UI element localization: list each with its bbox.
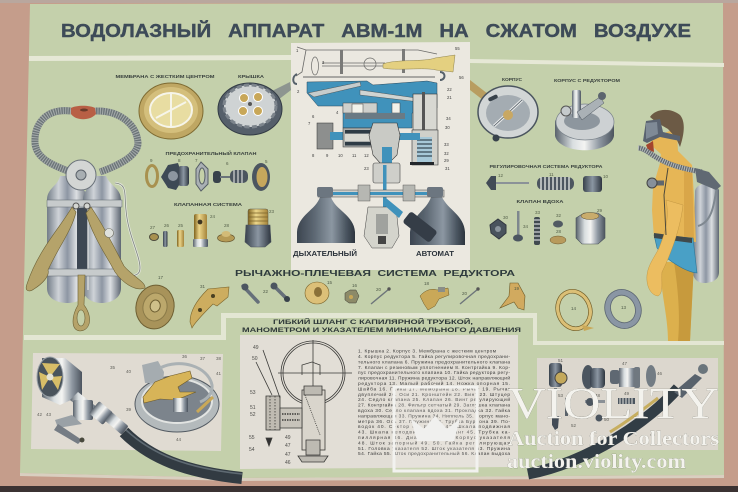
hose [124, 364, 708, 478]
part numbers, middle row: 14 [571, 306, 577, 311]
heading: lever system: РЫЧАЖНО-ПЛЕЧЕВАЯ СИСТЕМА РЕДУКТОРА [235, 269, 515, 278]
drawing callouts: 50 [252, 356, 258, 362]
numbers: 53 [558, 393, 564, 398]
part: housing [470, 80, 538, 142]
drawing callouts: 55 [249, 435, 255, 441]
text watermark: Auction for Collectors [508, 428, 719, 450]
legend text: 24. Седло клапана 25. Клапан 26. Винт регулирующий [358, 396, 510, 403]
inhalation valve [393, 92, 438, 165]
callout numbers: 29 [444, 158, 449, 163]
part numbers, top left [150, 158, 275, 230]
lower frame strip [24, 313, 724, 345]
numbers: 38 [216, 356, 222, 361]
numbers: 48 [595, 393, 601, 398]
labels: right parts: КОРПУС [502, 77, 523, 82]
part: cover [218, 82, 291, 135]
numbers: 36 [182, 354, 188, 359]
part numbers, middle row: 20 [462, 291, 468, 296]
part numbers, middle row: 20 [376, 287, 382, 292]
callout numbers: 56 [459, 75, 464, 80]
legend text: 27. Контргайка 28. Фильтр сетчатый 29. Заглушка клапана [358, 402, 510, 409]
part numbers, middle row: 17 [158, 275, 164, 280]
numbers: 52 [571, 423, 577, 428]
legend text: 4. Корпус редуктора 5. Гайка регулировочная предохрани- [358, 353, 510, 360]
part numbers, top left: 28 [224, 223, 230, 228]
part numbers, top left: 24 [210, 214, 216, 219]
callout numbers: 6 [312, 114, 315, 119]
legend text: 51. Головка указателя 52. Шток указателя 53. Пружина [358, 446, 510, 452]
torso and neck [652, 135, 696, 242]
callout numbers: 30 [445, 125, 450, 130]
rings 14 and 13 [552, 287, 644, 333]
stamp box watermark [394, 387, 477, 471]
text watermark: VIOLITY [508, 379, 719, 428]
numbers [558, 358, 663, 437]
blue air chamber [307, 81, 437, 128]
part numbers, right: 28 [556, 229, 562, 234]
numbers: 43 [46, 412, 52, 417]
mask [643, 119, 680, 143]
legend text: редуктора 13. Малый рабочий 14. Ножка опорная 15. [358, 380, 510, 387]
drawing callouts: 49 [285, 435, 291, 441]
central fitting [369, 123, 400, 215]
callout numbers: 11 [352, 153, 357, 158]
drawing callouts: 46 [285, 460, 291, 466]
heading: flexible hose: МАНОМЕТРОМ И УКАЗАТЕЛЕМ МИНИМАЛЬНОГО ДАВЛЕНИЯ [242, 327, 521, 334]
legend text [358, 348, 510, 457]
numbers: 49 [624, 391, 630, 396]
part numbers, top left: 6 [226, 161, 229, 166]
numbers: 45 [650, 432, 656, 437]
heading: flexible hose [242, 317, 521, 334]
regulator [66, 160, 96, 190]
numbers [37, 354, 222, 442]
numbers: 51 [558, 358, 564, 363]
label: avtomat: АВТОМАТ [416, 251, 455, 258]
part numbers, right: 29 [597, 208, 603, 213]
callout numbers: 33 [444, 142, 449, 147]
part labels, top left: ПРЕДОХРАНИТЕЛЬНЫЙ КЛАПАН [166, 149, 257, 156]
callout numbers: 34 [446, 116, 451, 121]
face [651, 130, 677, 155]
callout numbers: 31 [445, 166, 450, 171]
legend text: 7. Клапан с резиновым уплотнением 8. Контргайка 9. Кор- [358, 364, 510, 371]
part numbers, right: 10 [603, 174, 609, 179]
title band strip [29, 55, 291, 61]
part numbers, top left: 23 [269, 209, 275, 214]
legs [660, 262, 694, 341]
cylinders [47, 176, 88, 303]
callout numbers [296, 46, 464, 171]
lever system parts [132, 282, 525, 332]
part numbers, middle row: 13 [621, 305, 627, 310]
belt [654, 233, 692, 243]
legend text: Шайба 16. Гайка 17. Мембрана 18. Рычаг 19. Рычаг [358, 385, 510, 392]
part: membrane [139, 83, 203, 139]
numbers: 39 [126, 407, 132, 412]
numbers: 37 [200, 356, 206, 361]
part numbers, middle row [158, 275, 627, 311]
arm [647, 200, 683, 296]
part labels, top left: КЛАПАННАЯ СИСТЕМА [174, 202, 243, 207]
regulator body [343, 103, 377, 113]
drawing callouts [249, 345, 291, 466]
legend text: 54. Гайка 55. Шток предохранительный 56. Клапан выдоха [358, 450, 510, 457]
numbers: 50 [604, 417, 610, 422]
callout numbers: 7 [308, 121, 311, 126]
part labels, top left [116, 74, 265, 207]
part numbers, right [498, 172, 609, 234]
text watermark: auction.violity.com [507, 451, 686, 473]
callout numbers: 8 [312, 153, 315, 158]
panel: central cross-section [291, 42, 470, 270]
labels: right parts: КОРПУС С РЕДУКТОРОМ [554, 78, 620, 83]
legend text: пиллярная 46. Диафрагма 47. Корпус указателя [358, 435, 510, 441]
callout numbers: 12 [364, 153, 369, 158]
part numbers, middle row: 31 [200, 284, 206, 289]
inhalation valve system parts [150, 209, 271, 247]
legend text: 43. Шкала неподвижная 44. Шланг 45. Трубка ка- [358, 430, 510, 436]
drawing callouts: 53 [250, 390, 256, 396]
part numbers, middle row: 16 [352, 283, 358, 288]
side tube [115, 183, 140, 275]
hoses [35, 111, 138, 172]
panel: lower right indicator parts [537, 358, 718, 450]
scuba tank [693, 183, 719, 283]
drawing callouts: 52 [250, 412, 256, 418]
numbers: 47 [622, 361, 628, 366]
drawing callouts: 47 [285, 452, 291, 458]
adjusting system parts [486, 176, 602, 192]
legend text: вдоха 30. Седло клапана вдоха 31. Прокладка 32. Гайка [358, 407, 510, 414]
callout numbers: 32 [444, 151, 449, 156]
manometer section drawing [256, 340, 352, 462]
drawing callouts: 51 [250, 405, 256, 411]
breathing hose [638, 148, 702, 172]
callout numbers: 21 [447, 95, 452, 100]
part numbers, right: 12 [498, 173, 504, 178]
legend text: водок 40. Сектор 41. Шайба 42. Шкала подвижная [358, 423, 510, 430]
panel: manometer drawing and legend [240, 335, 518, 469]
numbers: 44 [176, 437, 182, 442]
breathing automat lower fitting [364, 198, 438, 248]
drawing callouts: 54 [249, 447, 255, 453]
drawing callouts: 47 [285, 443, 291, 449]
part numbers, top left: 25 [178, 223, 184, 228]
callout numbers: 2 [297, 89, 300, 94]
part numbers, top left: 7 [195, 158, 198, 163]
straps [26, 207, 76, 291]
callout numbers: 22 [447, 87, 452, 92]
labels: right parts: КЛАПАН ВДОХА [516, 199, 564, 204]
safety valve parts [146, 162, 270, 191]
harness strap [664, 168, 668, 235]
part numbers, right: 32 [556, 213, 562, 218]
callout numbers: 23 [364, 166, 369, 171]
numbers: 46 [657, 371, 663, 376]
diver figure [638, 110, 721, 341]
manifold tube [317, 185, 444, 201]
numbers: 42 [37, 412, 43, 417]
legend text: пус предохранительного клапана 10. Гайка редуктора регу- [358, 369, 510, 376]
drawing callouts: 49 [253, 345, 259, 351]
legend text: двуплечий 20. Оси 21. Кронштейн 22. Винт 23. Штуцер [358, 391, 510, 398]
part: housing with reducer [555, 90, 614, 150]
part numbers, middle row: 15 [327, 280, 333, 285]
legend text: лировочная 11. Пружина редуктора 12. Шток направляющий [358, 375, 510, 382]
part numbers, right: 11 [549, 172, 554, 177]
indicator parts [549, 363, 656, 430]
part numbers, middle row: 22 [263, 289, 269, 294]
callout numbers: 4 [336, 110, 339, 115]
part numbers, right: 34 [523, 224, 529, 229]
heading: flexible hose: ГИБКИЙ ШЛАНГ С КАПИЛЯРНОЙ ТРУБКОЙ, [273, 317, 473, 326]
label: dykhatelny: ДЫХАТЕЛЬНЫЙ [293, 249, 357, 258]
legend text: тельного клапана 6. Пружина предохранительного клапана [358, 359, 510, 365]
hair [650, 110, 684, 147]
legend text: 48. Шток запорный 49. 50. Гайка регулирующая [358, 439, 510, 446]
part numbers, top left: 27 [150, 225, 156, 230]
bottle right [410, 192, 465, 245]
part numbers, top left: 8 [178, 158, 181, 163]
aqualung apparatus [26, 106, 145, 331]
clamp bands [47, 200, 122, 207]
part numbers, right: 33 [535, 210, 541, 215]
callout numbers: 10 [338, 153, 343, 158]
part numbers, right: 30 [503, 215, 509, 220]
numbers: 40 [126, 369, 132, 374]
numbers: 41 [216, 371, 222, 376]
gauge with dial [37, 357, 129, 444]
part numbers, middle row: 19 [514, 286, 520, 291]
opened gauge mechanism [135, 361, 219, 432]
numbers: 35 [110, 365, 116, 370]
legend text: направляющая 33. Пружина 34. Ниппель 35. Корпус мано- [358, 413, 510, 419]
regulator at chest [652, 180, 664, 186]
inhalation valve parts [490, 211, 605, 245]
callout numbers: 1 [296, 48, 299, 53]
text watermark [507, 379, 719, 473]
part numbers, top left: 26 [164, 223, 170, 228]
swim trunks [654, 235, 697, 273]
cap outline and mouth tube [293, 47, 455, 84]
callout numbers: 9 [326, 153, 329, 158]
callout numbers: 3 [322, 60, 325, 65]
valve on back [695, 168, 721, 190]
callout numbers: 55 [455, 46, 460, 51]
part numbers, top left: 9 [150, 158, 153, 163]
left reducer assembly [317, 123, 379, 149]
part labels, top left: МЕМБРАНА С ЖЕСТКИМ ЦЕНТРОМ [116, 74, 215, 79]
labels: right parts: РЕГУЛИРОВОЧНАЯ СИСТЕМА РЕДУКТОРА [490, 164, 603, 169]
part numbers, top left: 5 [265, 159, 268, 164]
labels: right parts [490, 77, 620, 204]
title: ВОДОЛАЗНЫЙ АППАРАТ АВМ-1М НА СЖАТОМ ВОЗДУХЕ [61, 20, 691, 41]
bottle left [297, 192, 355, 243]
part labels, top left: КРЫШКА [238, 74, 265, 79]
panel: lower left pressure gauge [31, 353, 223, 451]
legend text: 1. Крышка 2. Корпус 3. Мембрана с жестким центром [358, 348, 496, 354]
legend text: метра 36. Ось 37. Пружина 38. Трубка Бурдона 39. По- [358, 419, 510, 425]
mouthpiece [71, 106, 96, 119]
crown [411, 416, 460, 441]
part numbers, middle row: 18 [424, 281, 430, 286]
